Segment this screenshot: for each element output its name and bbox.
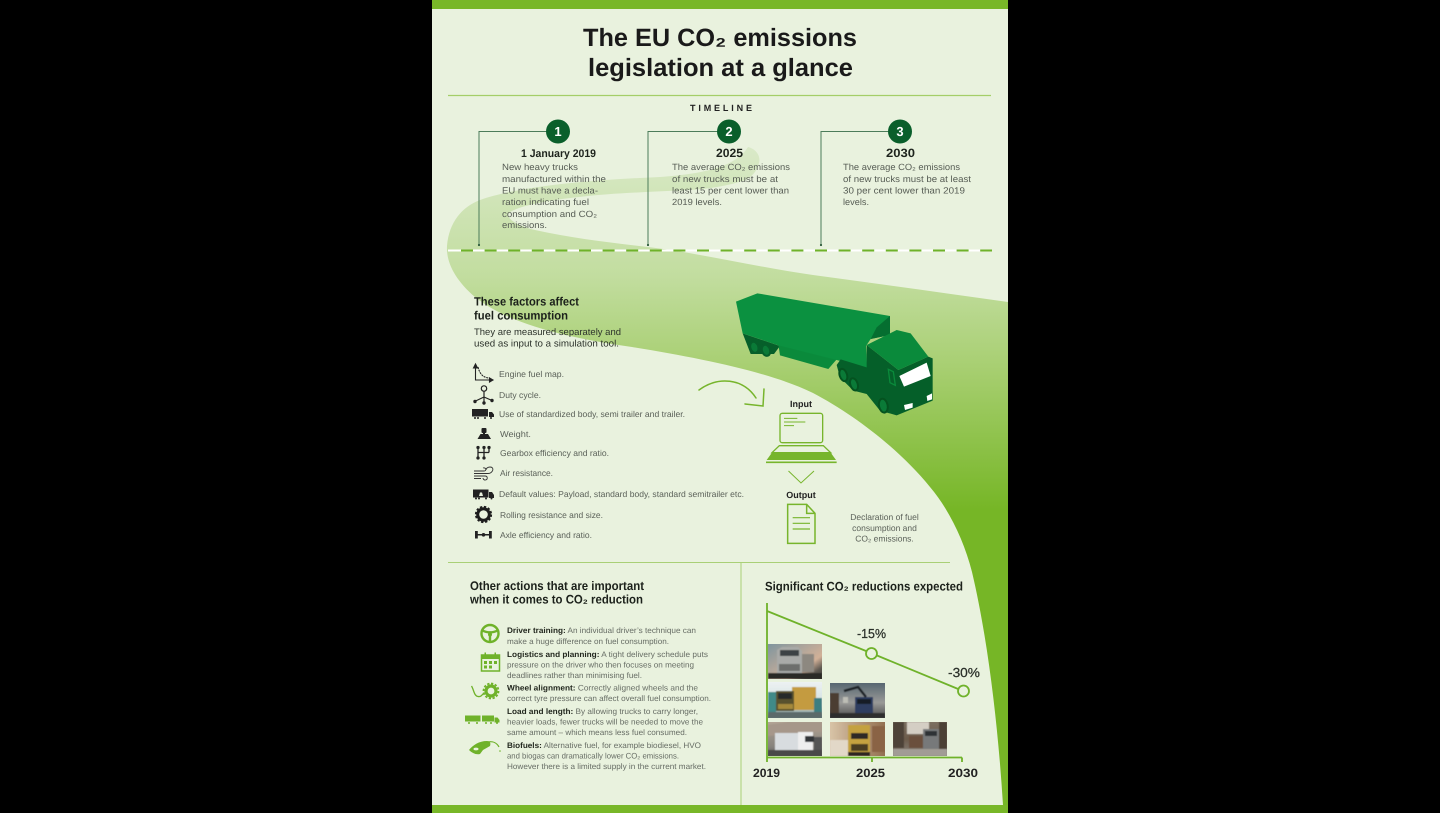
action: load and length: heavier loads, fewer trucks will be needed to move the [507, 718, 704, 726]
factors intro [474, 327, 621, 350]
description 1: EU must have a decla- [502, 186, 598, 196]
description 1: New heavy trucks [502, 162, 579, 172]
output label: Output [786, 490, 816, 500]
description 3 [843, 162, 972, 207]
icon: long truck [465, 716, 500, 724]
photo: crane truck [830, 683, 885, 718]
factors intro: They are measured separately and [474, 327, 621, 338]
factor: gearbox: Gearbox efficiency and ratio. [500, 448, 609, 458]
action: biofuels: However there is a limited supply in the current market. [507, 762, 706, 771]
action: driver training: make a huge difference on fuel consumption. [507, 637, 669, 646]
factor: engine fuel map: Engine fuel map. [499, 369, 564, 379]
icon: engine fuel map [474, 364, 493, 382]
action: load and length: same amount – which means less fuel consumed. [507, 728, 687, 737]
factor: air resistance: Air resistance. [500, 468, 553, 478]
number badge 3 [888, 120, 912, 144]
icon: duty cycle [474, 386, 493, 404]
icon: steering wheel [482, 625, 498, 642]
description 3: 30 per cent lower than 2019 [843, 186, 965, 196]
factor: rolling resistance: Rolling resistance and size. [500, 510, 603, 520]
bracket 2 [647, 132, 729, 246]
description 1: emissions. [502, 220, 547, 230]
action: driver training: Driver training: An individual driver’s technique can [507, 626, 696, 635]
factors heading: These factors affect [474, 294, 579, 308]
description 3: of new trucks must be at least [843, 174, 972, 184]
bottom green bar [432, 805, 1008, 813]
action: wheel alignment: Wheel alignment: Correctly aligned wheels and the [507, 684, 699, 692]
title: The EU CO₂ emissions [583, 24, 857, 52]
truck [736, 293, 933, 415]
action: driver training [507, 626, 696, 646]
action: load and length [507, 707, 704, 737]
factor: default values: Default values: Payload, standard body, standard semitrailer etc. [499, 489, 744, 499]
date 1: 1 January 2019 [521, 148, 596, 160]
value -15%: -15% [857, 626, 886, 641]
date 3: 2030 [886, 146, 915, 160]
description 2 [672, 162, 791, 207]
icon: rolling resistance [476, 507, 491, 522]
icon: fuel nozzle [469, 741, 501, 754]
action: logistics and planning [507, 650, 708, 680]
timeline heading: TIMELINE [690, 103, 752, 113]
other actions heading: when it comes to CO₂ reduction [469, 592, 643, 606]
icon: gearbox [477, 446, 490, 459]
photo: yellow truck [768, 682, 822, 718]
icon: air resistance [474, 467, 493, 480]
number badge 3: 3 [896, 124, 904, 139]
output description: Declaration of fuel [850, 512, 919, 522]
chart axes [767, 603, 962, 762]
action: load and length: Load and length: By allowing trucks to carry longer, [507, 707, 698, 716]
other actions heading: Other actions that are important [470, 579, 645, 593]
action: logistics and planning: deadlines rather than minimising fuel. [507, 671, 642, 680]
description 2: least 15 per cent lower than [672, 186, 789, 196]
panel: reductions chart [753, 580, 980, 780]
top green bar [432, 0, 1008, 9]
description 2: of new trucks must be at [672, 174, 779, 184]
output description: CO₂ emissions. [855, 534, 914, 544]
value -30%: -30% [948, 665, 980, 680]
year 2030: 2030 [948, 766, 978, 780]
bracket 1 [478, 132, 558, 246]
description 2: 2019 levels. [672, 197, 722, 207]
factor list [472, 364, 744, 540]
dashed timeline line [448, 250, 992, 252]
bracket 3 [820, 132, 900, 246]
action: biofuels: and biogas can dramatically lower CO₂ emissions. [507, 752, 679, 760]
other actions heading [469, 579, 645, 606]
description 1 [502, 162, 606, 230]
icon: wheel alignment [472, 684, 498, 698]
icon: calendar [482, 652, 500, 671]
action: biofuels [507, 741, 706, 771]
icon: axle [475, 531, 492, 538]
description 1: ration indicating fuel [502, 197, 589, 207]
description 3: The average CO₂ emissions [843, 162, 961, 172]
factors heading [474, 294, 579, 322]
title: legislation at a glance [588, 54, 853, 82]
number badge 2: 2 [725, 124, 733, 139]
action: logistics and planning: pressure on the driver who then focuses on meeting [507, 660, 694, 670]
icon: laptop [766, 413, 837, 462]
photo: gold truck [830, 722, 885, 756]
year 2025: 2025 [856, 766, 885, 780]
number badge 2 [717, 120, 741, 144]
number badge 1: 1 [554, 124, 562, 139]
description 1: consumption and CO₂ [502, 209, 598, 219]
arrow to input [699, 381, 764, 406]
factor: weight: Weight. [500, 429, 531, 439]
photo: forest truck [893, 722, 947, 756]
factor: axle: Axle efficiency and ratio. [500, 530, 592, 540]
road graphic [447, 147, 1008, 805]
timeline step 2 [647, 120, 791, 246]
icon: document [788, 504, 815, 543]
factors heading: fuel consumption [474, 308, 568, 322]
trend line [767, 611, 963, 691]
timeline step 3 [820, 120, 972, 246]
timeline step 1 [478, 120, 606, 246]
title [583, 24, 857, 82]
page background [432, 0, 1008, 813]
action: wheel alignment [507, 684, 711, 703]
panel: other actions [465, 579, 711, 771]
output description: consumption and [852, 523, 917, 533]
description 2: The average CO₂ emissions [672, 162, 791, 172]
description 3: levels. [843, 197, 869, 207]
marker 2030 [958, 686, 969, 696]
year 2019: 2019 [753, 766, 780, 780]
factor: standardized body: Use of standardized body, semi trailer and trailer. [499, 409, 685, 419]
icon: default values truck [473, 490, 494, 500]
action: biofuels: Biofuels: Alternative fuel, for example biodiesel, HVO [507, 741, 701, 750]
date 2: 2025 [716, 146, 743, 160]
chart heading: Significant CO₂ reductions expected [765, 580, 963, 594]
action: logistics and planning: Logistics and planning: A tight delivery schedule puts [507, 650, 708, 659]
photo: white truck [768, 722, 822, 756]
action: wheel alignment: correct tyre pressure can affect overall fuel consumption. [507, 694, 711, 703]
description 1: manufactured within the [502, 174, 606, 184]
factor: duty cycle: Duty cycle. [499, 390, 541, 400]
chevron: input to output [788, 471, 814, 483]
input label: Input [790, 399, 812, 409]
photo: silver truck [768, 644, 822, 679]
marker 2025 [866, 648, 877, 659]
icon: weight [478, 428, 491, 439]
output description [850, 512, 919, 544]
factors intro: used as input to a simulation tool. [474, 338, 619, 350]
icon: truck with trailer [472, 409, 494, 419]
